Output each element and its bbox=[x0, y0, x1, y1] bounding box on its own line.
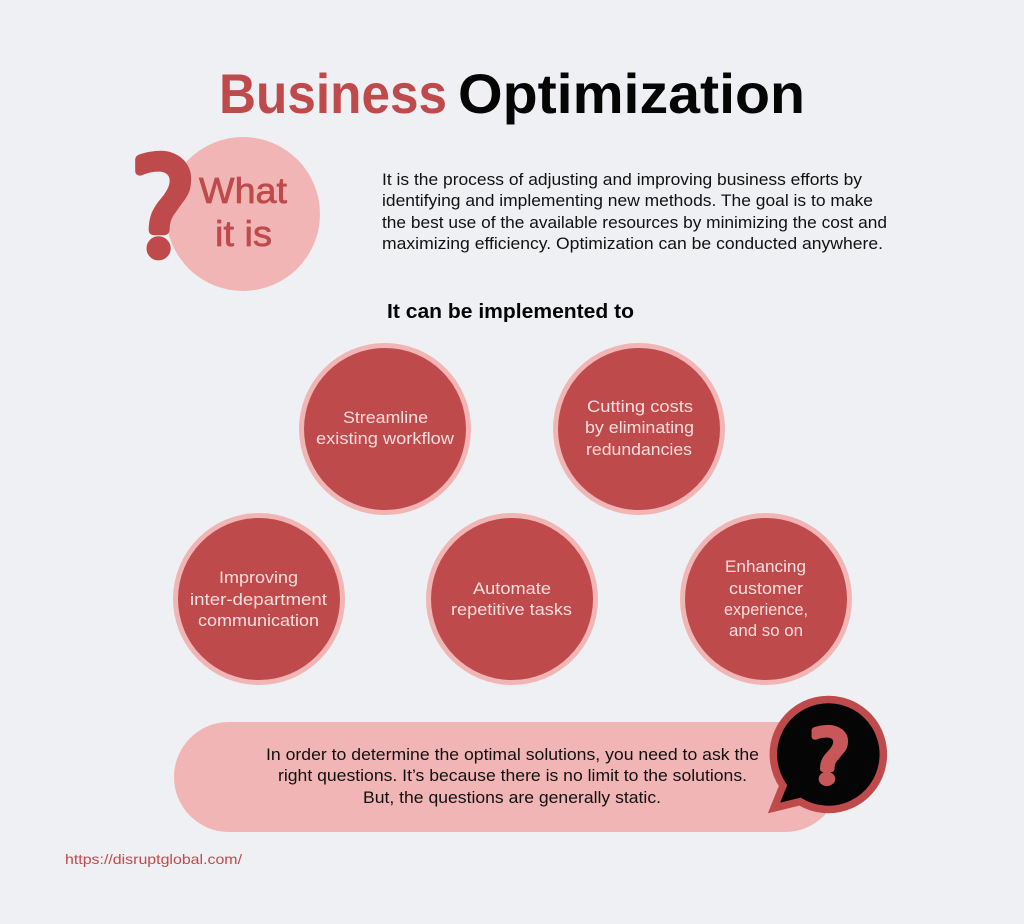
panel: automate circle bbox=[426, 513, 598, 685]
text block: definition: It is the process of adjusting and improving business efforts by bbox=[382, 170, 863, 189]
panel: customer experience circle bbox=[680, 513, 852, 685]
callout: optimal solutions: right questions. It’s because there is no limit to the solutions. bbox=[278, 766, 747, 785]
panel: automate circle: Automate bbox=[473, 579, 551, 598]
panel: cutting costs circle: by eliminating bbox=[585, 418, 694, 437]
title: Optimization bbox=[458, 62, 805, 125]
callout: optimal solutions bbox=[174, 722, 840, 832]
icon: speech bubble with question mark: ? bbox=[806, 723, 852, 794]
panel: customer experience circle: experience, bbox=[724, 600, 808, 619]
text block: definition: identifying and implementing new methods. The goal is to make bbox=[382, 191, 873, 210]
text block: definition: the best use of the available resources by minimizing the cost and bbox=[382, 213, 887, 232]
panel: customer experience circle: and so on bbox=[729, 621, 803, 640]
heading: implementation: It can be implemented to bbox=[387, 301, 634, 323]
panel: communication circle: Improving bbox=[219, 568, 298, 587]
badge label: it is bbox=[215, 213, 272, 254]
icon: question mark: ? bbox=[126, 145, 198, 276]
title bbox=[219, 62, 805, 125]
panel: customer experience circle: Enhancing bbox=[725, 557, 806, 576]
panel: cutting costs circle: redundancies bbox=[586, 440, 692, 459]
callout: optimal solutions: In order to determine the optimal solutions, you need to ask the bbox=[266, 745, 759, 764]
panel: customer experience circle: customer bbox=[729, 579, 803, 598]
panel: streamline circle: existing workflow bbox=[316, 429, 455, 448]
badge label bbox=[199, 170, 287, 254]
badge label: What bbox=[199, 170, 287, 211]
panel: communication circle: communication bbox=[198, 611, 319, 630]
text block: definition: maximizing efficiency. Optimization can be conducted anywhere. bbox=[382, 234, 883, 253]
title: Business bbox=[219, 62, 447, 125]
text block: definition bbox=[382, 170, 887, 253]
panel: cutting costs circle: Cutting costs bbox=[587, 397, 693, 416]
panel: automate circle: repetitive tasks bbox=[451, 600, 572, 619]
source link: https://disruptglobal.com/ bbox=[65, 851, 242, 867]
icon: speech bubble with question mark bbox=[773, 699, 883, 809]
panel: streamline circle: Streamline bbox=[343, 408, 428, 427]
panel: communication circle bbox=[173, 513, 345, 685]
panel: cutting costs circle bbox=[553, 343, 725, 515]
panel: what it is badge bbox=[126, 137, 320, 291]
callout: optimal solutions: But, the questions are generally static. bbox=[363, 788, 661, 807]
panel: communication circle: inter-department bbox=[190, 590, 327, 609]
panel: streamline circle bbox=[299, 343, 471, 515]
